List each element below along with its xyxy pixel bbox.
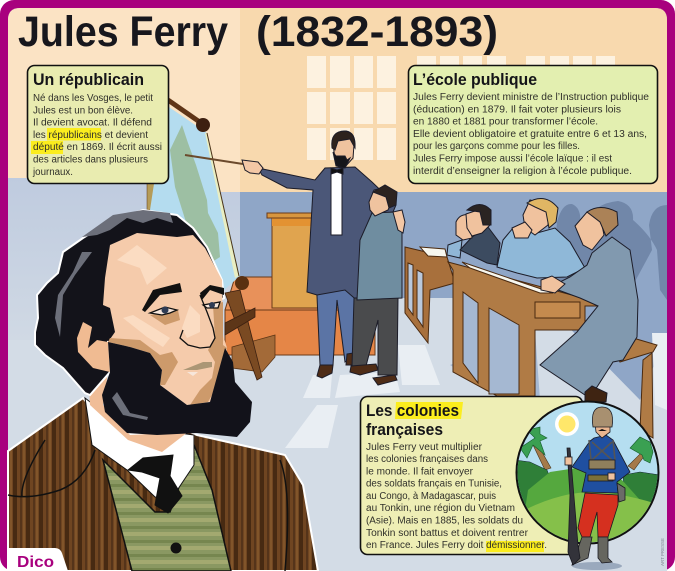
portrait: eyes, brows, nose and mouth: [142, 283, 224, 376]
text box: Les colonies françaises: françaises: [366, 420, 443, 439]
portrait: neck: [88, 368, 188, 452]
teacher's platform: [225, 277, 375, 355]
title: [18, 8, 498, 56]
text box: Les colonies françaises: des soldats français en Tunisie,: [366, 478, 502, 490]
text box: L'école publique: en 1880 et 1881 pour transformer l’école.: [413, 117, 598, 128]
shadows of pupils on wall: [550, 201, 667, 300]
floor light patches: [285, 333, 667, 448]
portrait: beard: [102, 342, 252, 437]
text box: Les colonies françaises: les colonies françaises dans: [366, 454, 488, 465]
text box: Un républicain: journaux.: [32, 167, 73, 178]
text box: Les colonies françaises: Jules Ferry veut multiplier: [366, 442, 483, 453]
teacher: Jules Ferry pointing: [185, 131, 396, 378]
text box: Un républicain: Un républicain: [33, 70, 144, 89]
text box: Les colonies françaises: le monde. Il fait envoyer: [366, 466, 474, 478]
text box: L'école publique: (éducation) en 1879. Il fait voter plusieurs lois: [413, 104, 621, 116]
text box: Les colonies françaises: Les colonies: [366, 401, 459, 420]
portrait: jacket: [8, 398, 318, 571]
pupil standing: [350, 185, 405, 385]
text box: L'école publique: Elle devient obligatoire et gratuite entre 6 et 13 ans,: [413, 129, 647, 140]
portrait: collar and tie: [85, 398, 194, 553]
portrait: hair: [35, 210, 224, 395]
lectern: [267, 213, 342, 308]
text box: Les colonies françaises: en France. Jules Ferry doit démissionner.: [366, 540, 547, 551]
text box: L'école publique: Jules Ferry impose aussi l’école laïque : il est: [413, 154, 612, 164]
text box: Les colonies françaises: au Congo, à Madagascar, puis: [366, 491, 496, 502]
text box: L'école publique: pour les garçons comme pour les filles.: [413, 141, 580, 152]
portrait: waistcoat: [103, 445, 231, 571]
title: Jules Ferry: [18, 8, 228, 56]
text box: Les colonies françaises: au Tonkin, une région du Vietnam: [366, 503, 515, 514]
portrait: face: [77, 233, 227, 405]
seated pupils at the back: [447, 199, 585, 278]
pupil in front: [540, 208, 638, 402]
text box: L'école publique: Jules Ferry devient ministre de l’Instruction publique: [413, 92, 649, 103]
tab: Dico: [8, 548, 68, 571]
text box: Les colonies françaises: Tonkin sont battus et doivent rentrer: [366, 528, 529, 539]
text box: Les colonies françaises: [360, 396, 582, 554]
text box: Les colonies françaises: (Asie). Mais en 1885, les soldats du: [366, 516, 523, 526]
school desks: [405, 247, 598, 396]
text box: Un républicain: député en 1869. Il écrit aussi: [33, 142, 162, 153]
tab: Dico: Dico: [17, 554, 54, 571]
text box: L'école publique: interdit d’enseigner la religion à l’école publique.: [413, 166, 632, 177]
windows on wall: [307, 56, 615, 160]
text box: Un républicain: Il devient avocat. Il défend: [33, 118, 152, 128]
soldier: [565, 407, 630, 570]
portrait: hair highlights: [55, 210, 173, 420]
text box: Un républicain: [28, 66, 168, 184]
text box: Un républicain: Jules est un bon élève.: [33, 105, 133, 116]
title: (1832-1893): [256, 8, 498, 56]
text box: L'école publique: [408, 66, 658, 184]
text box: Un républicain: Né dans les Vosges, le petit: [33, 93, 153, 104]
text box: L'école publique: L’école publique: [413, 70, 537, 89]
credit: ART PRESSE: ART PRESSE: [660, 538, 665, 566]
text box: Un républicain: les républicains et devient: [33, 130, 148, 141]
map on easel: [147, 100, 275, 380]
medallion: colonial landscape: [515, 402, 660, 550]
text box: Un républicain: des articles dans plusieurs: [33, 154, 148, 166]
bench: [618, 338, 657, 438]
